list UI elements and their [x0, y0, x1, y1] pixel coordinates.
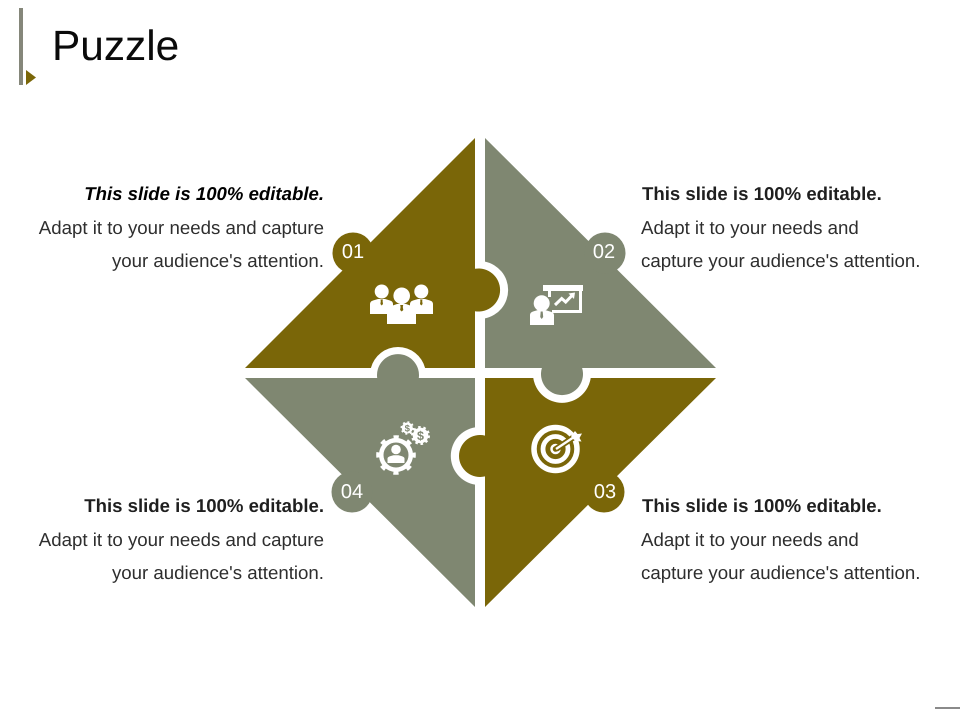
- icon: gear with person and dollar coins: $: [405, 423, 411, 434]
- icon: gear with person and dollar coins: $: [417, 429, 424, 443]
- text block 02: [641, 183, 920, 271]
- puzzle diagram: [245, 138, 716, 607]
- number 01: 01: [342, 241, 364, 263]
- text block 04: [39, 495, 324, 583]
- icon: gear with person and dollar coins: [378, 422, 429, 473]
- text block 01: your audience's attention.: [112, 250, 324, 271]
- text block 04: your audience's attention.: [112, 562, 324, 583]
- number 03: 03: [594, 481, 616, 503]
- piece 2: [485, 138, 716, 395]
- title marker triangle: [26, 70, 36, 85]
- text block 01: Adapt it to your needs and capture: [39, 217, 324, 238]
- text block 03: Adapt it to your needs and: [641, 529, 859, 550]
- piece 3: [459, 378, 716, 607]
- piece 4: [245, 354, 475, 607]
- text block 02: This slide is 100% editable.: [642, 183, 882, 204]
- number 04: 04: [341, 481, 363, 503]
- icon: target with arrow: [534, 428, 582, 470]
- title accent bar: [19, 8, 23, 85]
- text block 03: This slide is 100% editable.: [642, 495, 882, 516]
- text block 03: capture your audience's attention.: [641, 562, 920, 583]
- text block 02: capture your audience's attention.: [641, 250, 920, 271]
- text block 04: This slide is 100% editable.: [84, 495, 324, 516]
- text block 04: Adapt it to your needs and capture: [39, 529, 324, 550]
- title: Puzzle: [52, 22, 179, 69]
- footer line: [935, 707, 960, 709]
- piece 1: [245, 138, 500, 368]
- icon: team of people: [370, 284, 433, 324]
- text block 01: [39, 183, 324, 271]
- icon: presenter with chart: [530, 285, 583, 325]
- number 02: 02: [593, 241, 615, 263]
- text block 03: [641, 495, 920, 583]
- text block 01: This slide is 100% editable.: [84, 183, 324, 204]
- text block 02: Adapt it to your needs and: [641, 217, 859, 238]
